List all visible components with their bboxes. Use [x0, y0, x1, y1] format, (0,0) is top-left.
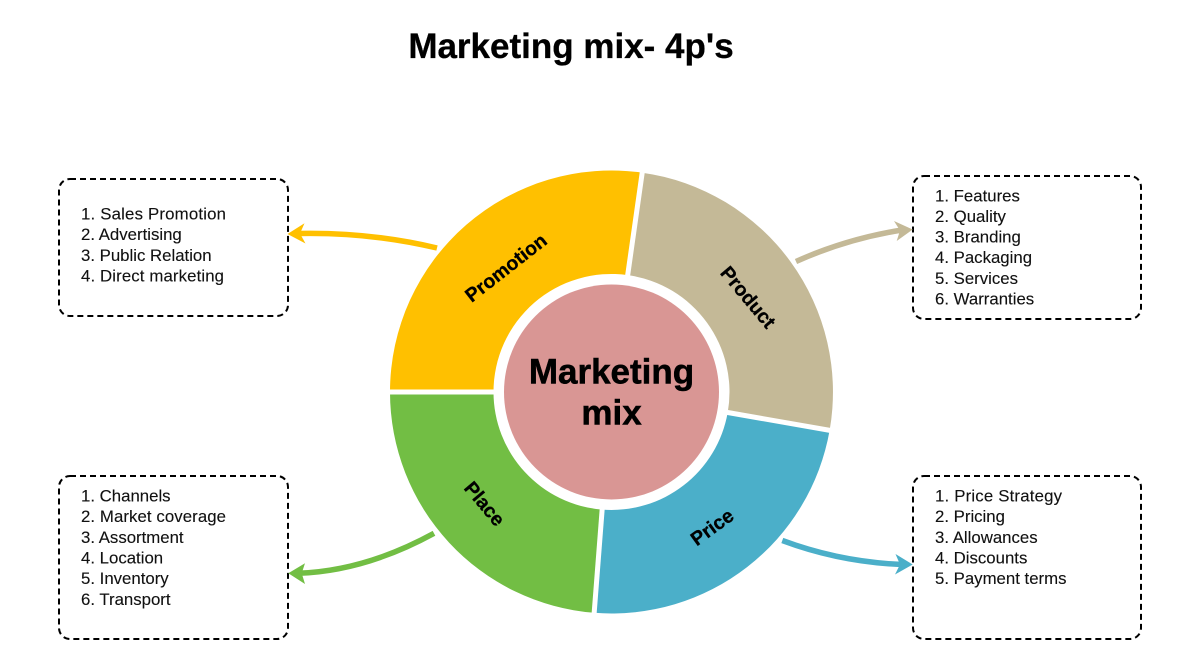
panel: Price list: 4. Discounts: [935, 548, 1027, 568]
arrow: Product to list: [796, 221, 913, 262]
arrow: Place to list: [288, 533, 434, 584]
segment: Price: Price: [687, 505, 738, 551]
arrow: Promotion to list: [288, 223, 437, 248]
panel: Product list: 4. Packaging: [935, 248, 1032, 267]
panel: Place list: 1. Channels: [81, 486, 171, 506]
panel: Price list: 1. Price Strategy: [935, 486, 1063, 506]
panel: Promotion list: 1. Sales Promotion: [81, 204, 226, 224]
panel: Product list: 1. Features: [935, 186, 1020, 206]
panel: Product list: [913, 176, 1141, 319]
segment: Place: [390, 392, 602, 613]
segment: Product: Product: [715, 262, 780, 333]
panel: Price list: 5. Payment terms: [935, 569, 1066, 588]
panel: Promotion list: [59, 179, 288, 316]
panel: Place list: 2. Market coverage: [81, 507, 226, 526]
center circle: Marketing: [529, 352, 694, 392]
center circle: mix: [581, 394, 642, 432]
panel: Product list: 6. Warranties: [935, 290, 1034, 308]
panel: Product list: 2. Quality: [935, 207, 1006, 226]
panel: Price list: [913, 476, 1141, 639]
panel: Price list: 2. Pricing: [935, 507, 1005, 526]
panel: Place list: [59, 476, 288, 639]
panel: Place list: 6. Transport: [81, 590, 171, 609]
center circle: [504, 284, 719, 500]
segment: Price: [594, 412, 830, 613]
panel: Promotion list: 2. Advertising: [81, 225, 182, 244]
panel: Promotion list: 3. Public Relation: [81, 246, 212, 265]
panel: Product list: 3. Branding: [935, 228, 1021, 246]
panel: Price list: 3. Allowances: [935, 528, 1038, 547]
title: Marketing mix- 4p's: [408, 27, 734, 66]
segment: Promotion: Promotion: [461, 230, 551, 307]
panel: Product list: 5. Services: [935, 269, 1018, 288]
panel: Place list: 5. Inventory: [81, 569, 169, 588]
segment: Product: [628, 173, 833, 430]
panel: Place list: 4. Location: [81, 548, 163, 568]
donut chart: marketing mix: [385, 160, 845, 628]
segment: Place: Place: [459, 478, 509, 531]
arrow: Price to list: [782, 540, 913, 574]
panel: Place list: 3. Assortment: [81, 528, 184, 547]
segment: Promotion: [390, 171, 642, 392]
panel: Promotion list: 4. Direct marketing: [81, 266, 224, 286]
